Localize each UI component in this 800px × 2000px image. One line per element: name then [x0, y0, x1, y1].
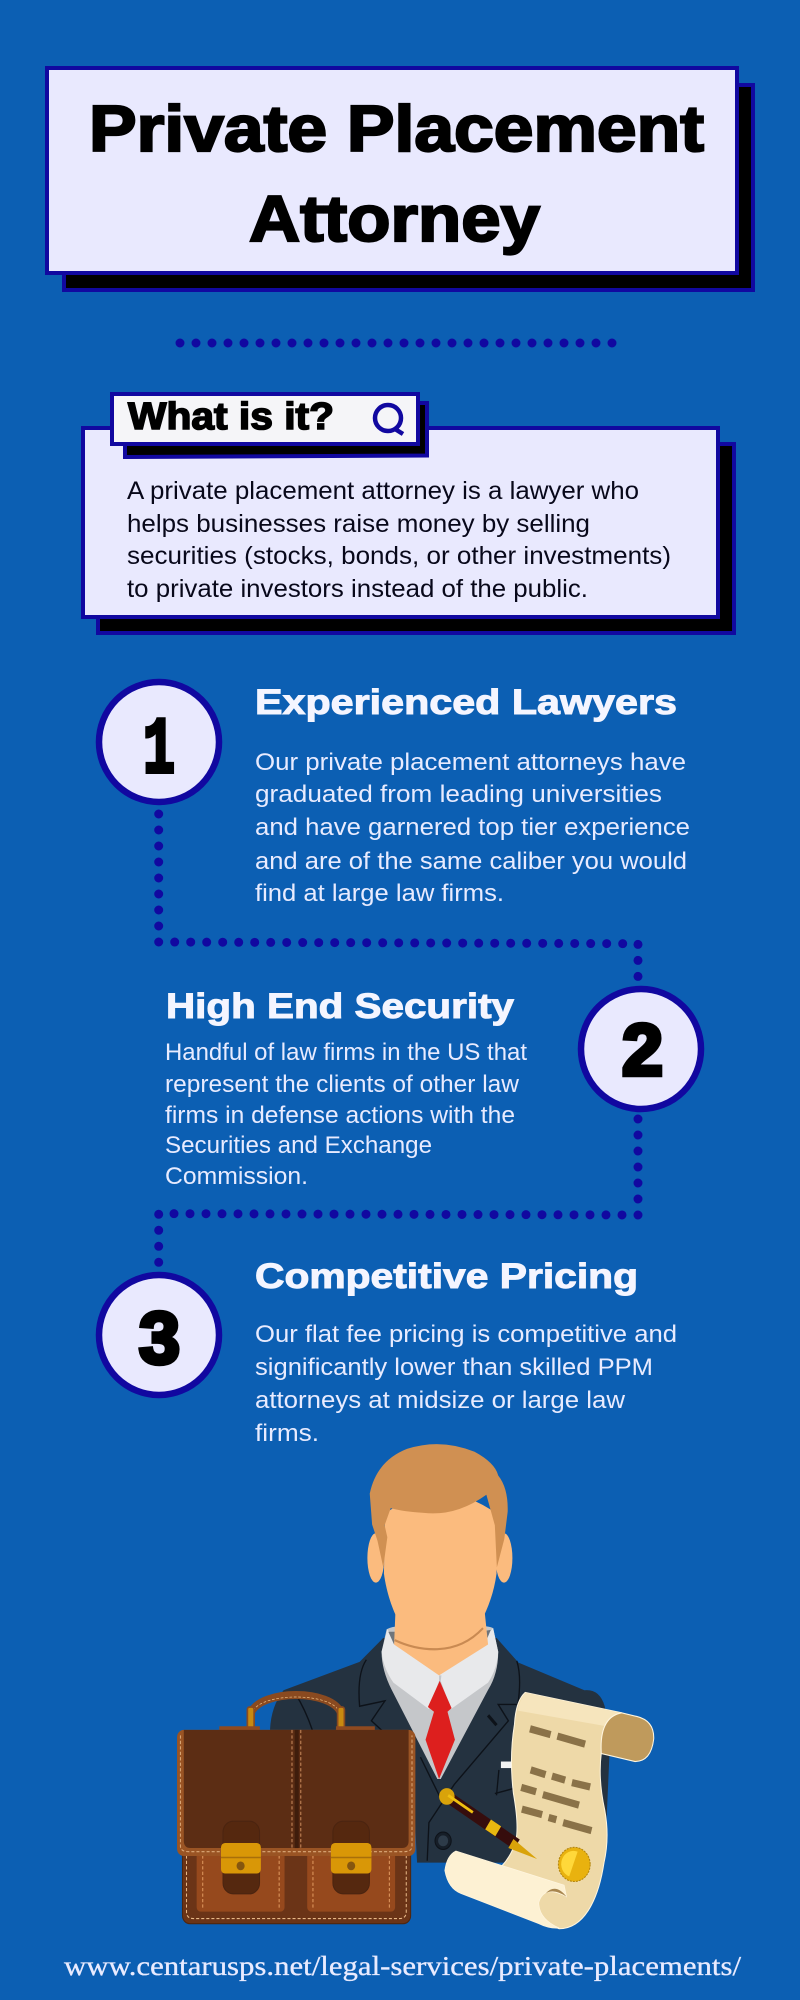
step 1 [99, 682, 690, 907]
step 1 text: and have garnered top tier experience [255, 814, 690, 841]
step 2 text: firms in defense actions with the [165, 1102, 515, 1129]
number badge 3 [99, 1275, 219, 1395]
what is it description: to private investors instead of the public. [127, 575, 588, 603]
icon: fountain pen [439, 1788, 537, 1859]
heading: experienced lawyers: Experienced Lawyers [255, 683, 677, 722]
step 3 text: significantly lower than skilled PPM [255, 1354, 653, 1381]
necktie [426, 1681, 455, 1779]
what is it description: A private placement attorney is a lawyer who [127, 477, 639, 505]
title panel [47, 68, 753, 290]
step 3 text: attorneys at midsize or large law [255, 1387, 626, 1414]
what is it description: helps businesses raise money by selling [127, 510, 590, 538]
step 2 text: Securities and Exchange [165, 1132, 432, 1159]
connector: step 2 to step 3 [159, 1119, 638, 1266]
number badge 3: 3 [139, 1298, 180, 1379]
tab: what is it heading: What is it? [128, 396, 334, 438]
panel: what is it [83, 394, 734, 633]
number badge 1 [99, 682, 219, 802]
step 3 [99, 1257, 677, 1447]
icon: scroll with seal [445, 1692, 654, 1929]
number badge 1: 1 [143, 706, 175, 797]
title: Private Placement [89, 92, 704, 165]
title: Attorney [249, 182, 540, 255]
number badge 2: 2 [622, 1010, 663, 1091]
step 1 text [255, 749, 690, 907]
title [89, 92, 704, 255]
number badge 2 [581, 989, 701, 1109]
step 3 text: Our flat fee pricing is competitive and [255, 1321, 677, 1348]
step 1 text: and are of the same caliber you would [255, 848, 687, 875]
step 3 text: firms. [255, 1420, 319, 1447]
icon: briefcase [177, 1695, 415, 1924]
what is it description [127, 477, 671, 603]
heading: competitive pricing: Competitive Pricing [255, 1257, 638, 1296]
dotted divider [180, 338, 616, 348]
step 2 text: represent the clients of other law [165, 1071, 520, 1098]
step 1 text: find at large law firms. [255, 880, 504, 907]
step 2 text: Commission. [165, 1163, 308, 1190]
step 1 text: Our private placement attorneys have [255, 749, 686, 776]
illustration: attorney with briefcase and scroll [177, 1444, 654, 1929]
step 1 text: graduated from leading universities [255, 781, 662, 808]
step 3 text [255, 1321, 677, 1447]
step 2 [165, 987, 701, 1190]
icon: magnifying glass [375, 405, 403, 434]
step 2 text [165, 1039, 527, 1190]
website footer: www.centarusps.net/legal-services/private-placements/ [64, 1951, 742, 1981]
what is it description: securities (stocks, bonds, or other investments) [127, 542, 671, 570]
connector: step 1 to step 2 [159, 814, 638, 980]
tab: what is it heading [112, 394, 427, 457]
step 2 text: Handful of law firms in the US that [165, 1039, 527, 1066]
icon: attorney figure [270, 1444, 610, 1863]
heading: high end security: High End Security [166, 987, 515, 1026]
